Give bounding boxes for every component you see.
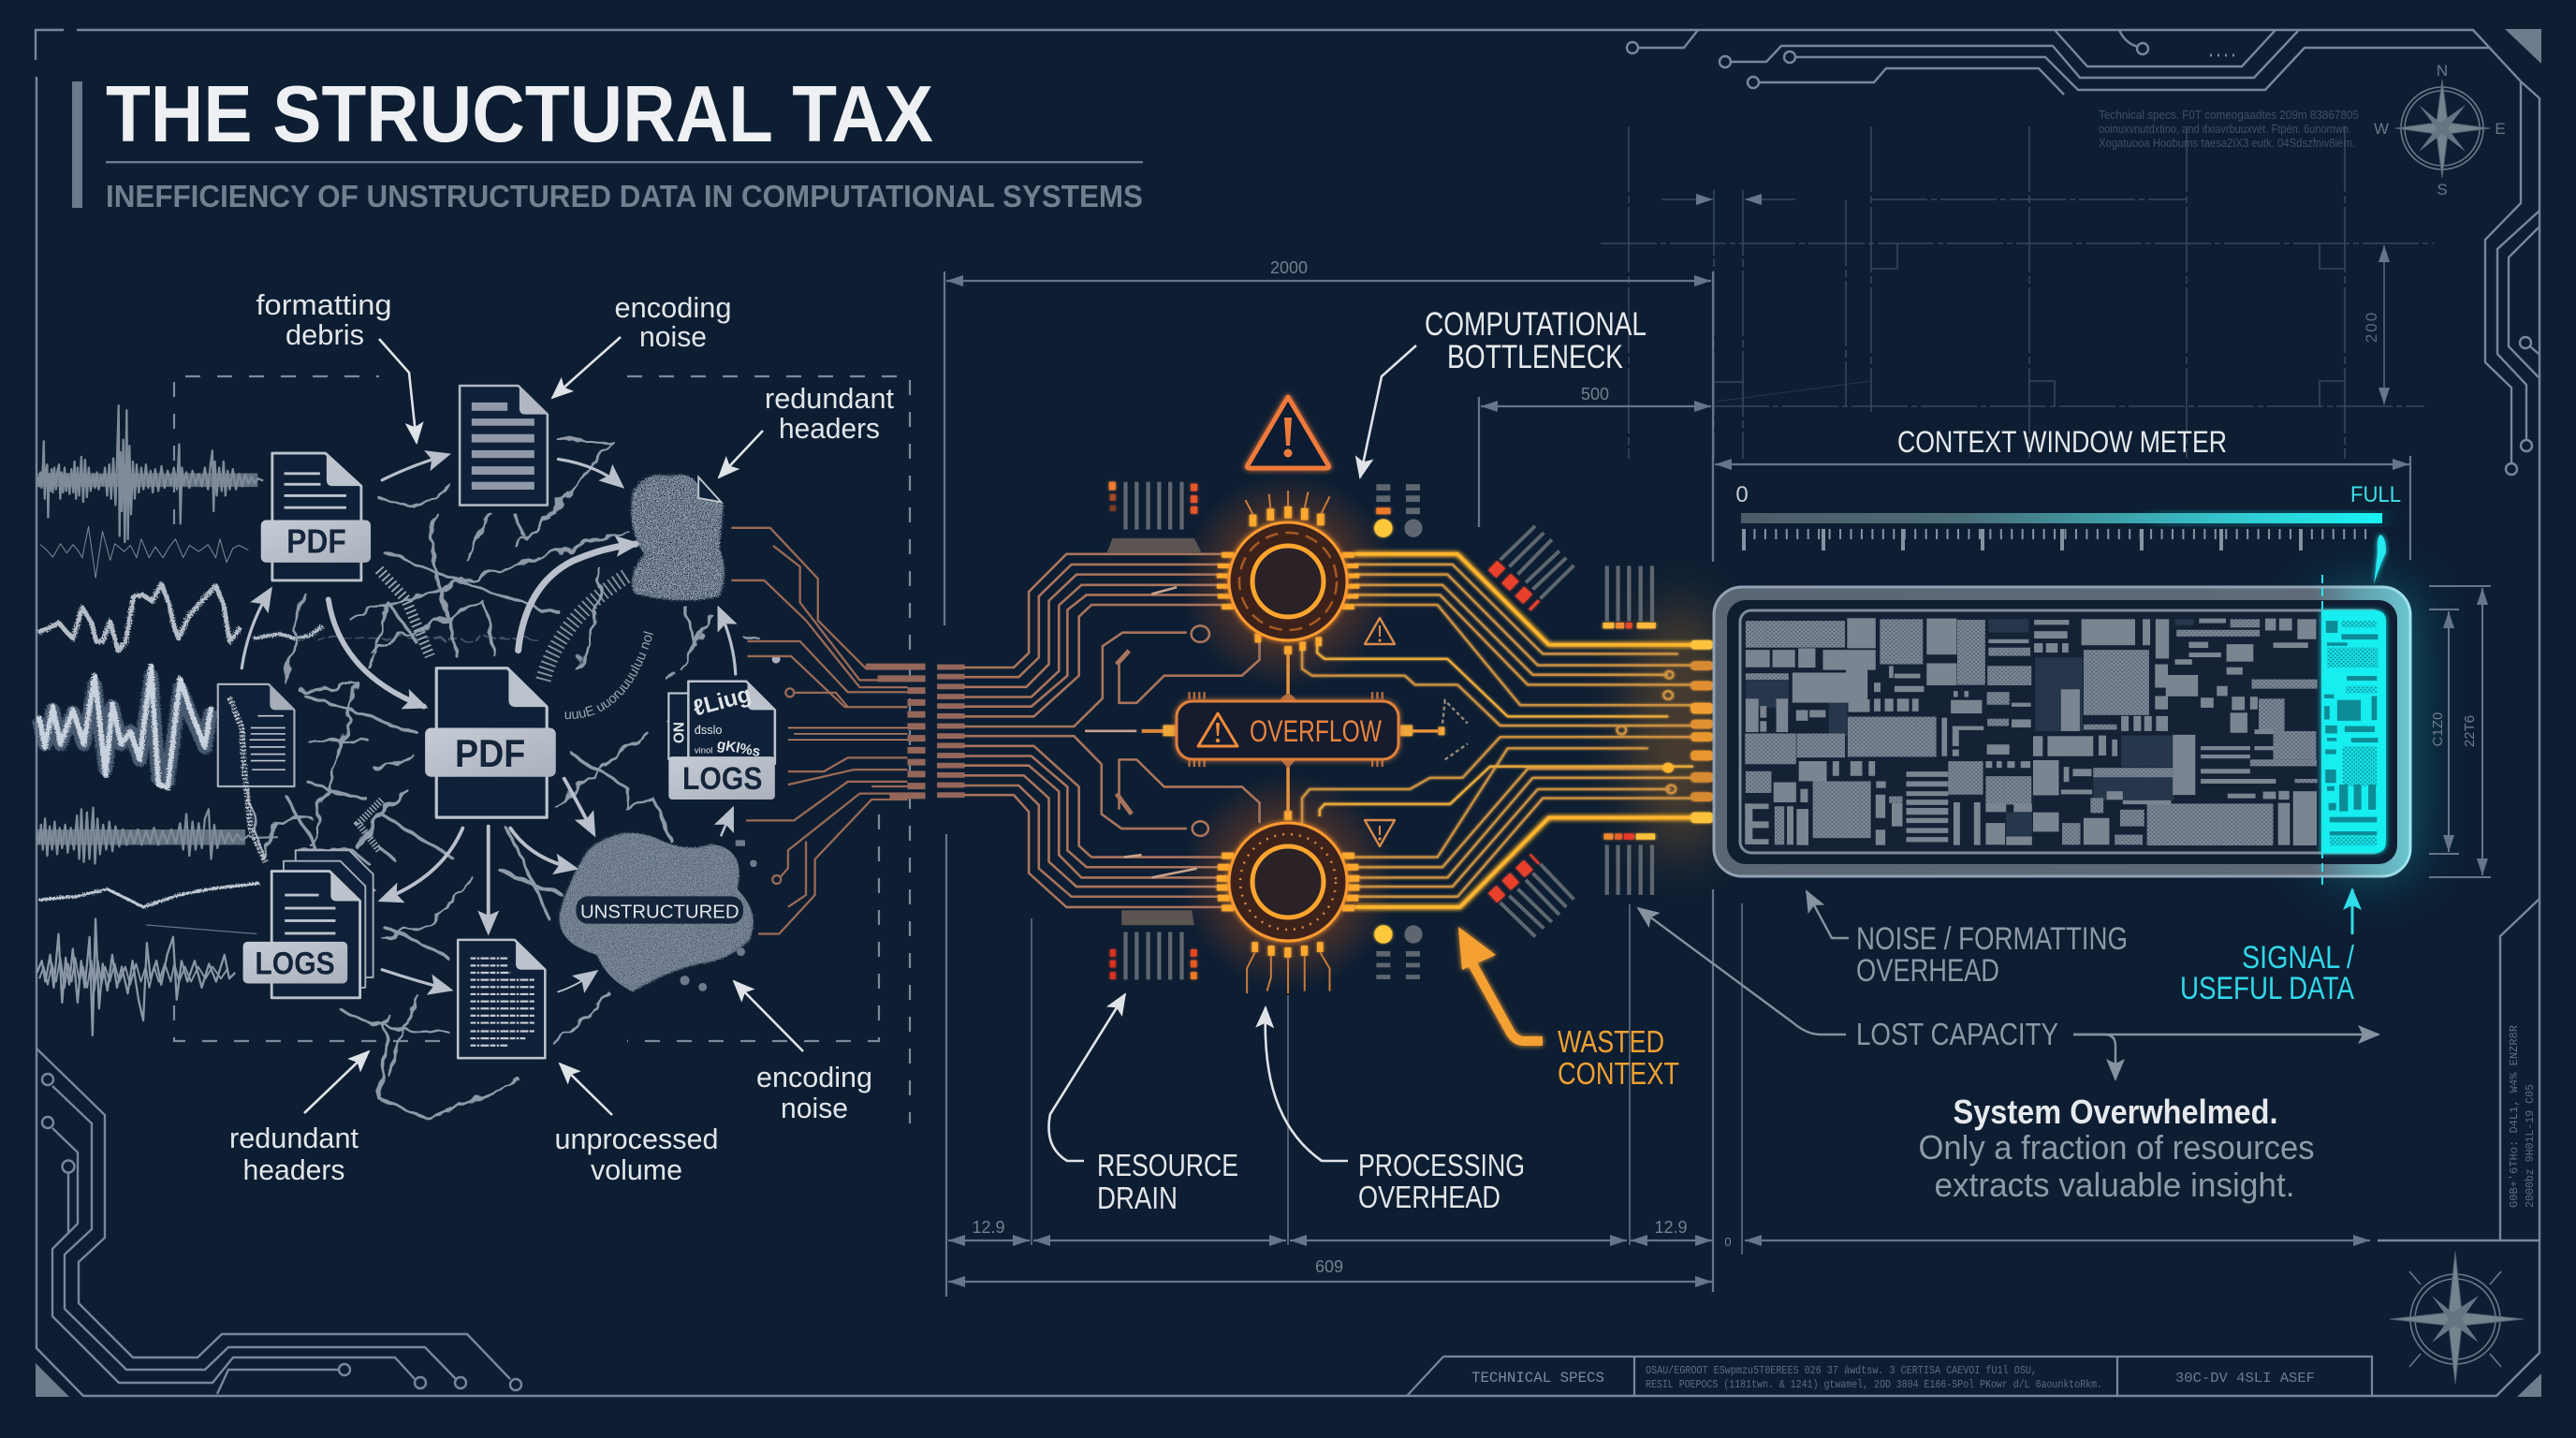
label: wasted context — [1558, 1024, 1679, 1091]
document: logs garbled: đsslo — [695, 723, 723, 737]
output pads — [1662, 640, 1713, 823]
dimension lines — [944, 271, 2370, 1297]
dimension labels: 12.9 — [1654, 1218, 1688, 1237]
document: logs stack: LOGS — [255, 946, 335, 981]
copper traces left — [963, 554, 1260, 907]
side notes — [2508, 1025, 2537, 1208]
panel: context window meter — [1713, 425, 2491, 888]
label: computational bottleneck: COMPUTATIONAL — [1425, 306, 1647, 343]
dimension labels: 12.9 — [972, 1218, 1005, 1237]
arrows: lost capacity — [1638, 908, 2378, 1079]
status lights — [1109, 482, 1656, 979]
unstructured blob — [560, 655, 781, 991]
window dimensions — [2429, 586, 2491, 877]
label: computational bottleneck: BOTTLENECK — [1447, 339, 1623, 375]
document: logs garbled: NO — [669, 722, 685, 743]
label: processing overhead: PROCESSING — [1358, 1148, 1525, 1182]
window inner — [1727, 600, 2397, 864]
summary text — [1919, 1128, 2314, 1204]
subtitle: INEFFICIENCY OF UNSTRUCTURED DATA IN COMPUTATIONAL SYSTEMS — [106, 179, 1143, 213]
accent bar — [72, 81, 82, 208]
document: logs garbled: ℓLiug — [691, 682, 754, 722]
summary heading: System Overwhelmed. — [1953, 1093, 2278, 1131]
dimension labels: 2000 — [1270, 258, 1308, 277]
arrow: signal — [2351, 889, 2353, 934]
window frame — [1740, 610, 2383, 853]
meter bar — [2153, 513, 2382, 523]
title: THE STRUCTURAL TAX — [106, 70, 933, 159]
upper right traces — [1302, 565, 1693, 897]
label: resource drain: RESOURCE — [1097, 1148, 1238, 1182]
label: processing overhead: OVERHEAD — [1358, 1180, 1500, 1214]
source labels: redundant — [765, 382, 894, 415]
summary text: extracts valuable insight. — [1934, 1166, 2295, 1204]
source labels: noise — [781, 1092, 848, 1124]
title block: TECHNICAL SPECS — [1471, 1370, 1604, 1387]
compass top right: E — [2495, 120, 2506, 138]
document: text page — [458, 940, 545, 1058]
technical note: Xogatuooa Hoobums taesa2IX3 eutk. 04Sdszfniv8iém. — [2099, 136, 2355, 150]
source labels: noise — [639, 320, 707, 353]
source labels: encoding — [614, 291, 732, 324]
window bezel — [1714, 587, 2410, 876]
diagonal bar groups — [1500, 526, 1573, 936]
waveform 2 — [40, 527, 248, 578]
meter dimension — [1713, 456, 2410, 560]
panel: data chaos — [217, 384, 926, 1121]
connector comb — [866, 664, 926, 799]
chip spikes and legs — [1246, 491, 1330, 993]
document: redacted — [460, 386, 548, 506]
compass top right: N — [2437, 62, 2448, 80]
label: signal — [2180, 940, 2354, 1006]
compass top right: W — [2374, 120, 2389, 138]
label: signal: SIGNAL / — [2242, 940, 2354, 976]
waveform 1 — [37, 405, 263, 542]
waveform 4 — [38, 667, 212, 787]
meter ticks — [1742, 534, 2372, 539]
full label: FULL — [2350, 482, 2401, 507]
window dimension labels: C1Z0 — [2430, 712, 2446, 746]
overflow badge — [1177, 701, 1398, 759]
label: noise overhead: OVERHEAD — [1856, 953, 1999, 989]
signal data blocks — [2324, 621, 2378, 845]
source labels: redundant — [229, 1122, 359, 1154]
label: computational bottleneck — [1425, 306, 1647, 375]
waveform 5 — [37, 808, 278, 863]
source labels: unprocessed — [554, 1123, 719, 1155]
title block: 30C-DV 4SLI ASEF — [2175, 1371, 2315, 1387]
document: logs garbled — [668, 682, 775, 800]
garbled text ribbon — [564, 621, 657, 719]
label: wasted context: CONTEXT — [1558, 1056, 1679, 1091]
title block: RESIL POEPOCS (1181twn. & 1241) gtwamel, 2OD 3804 E166-SPol PKowr d/L 6aounktoRkm. — [1646, 1378, 2102, 1391]
scribble ribbons — [359, 569, 627, 850]
document: PDF small: PDF — [286, 523, 346, 561]
source label arrows — [304, 337, 1416, 1161]
dimension 200: 200 — [2363, 311, 2380, 343]
connector glow — [1629, 599, 1732, 861]
chip halos — [1180, 474, 1396, 689]
small warning down — [1365, 820, 1395, 846]
bottom chip — [1229, 823, 1347, 941]
document: PDF large — [425, 668, 556, 817]
waveform 6 — [38, 883, 259, 907]
signal block — [2321, 610, 2386, 853]
overflow links — [1286, 653, 1290, 814]
grey bar groups — [1123, 482, 1654, 979]
grey chip caps — [1106, 538, 1202, 925]
debris lines — [244, 439, 758, 1119]
source labels: headers — [243, 1153, 344, 1186]
title block: OSAU/EGROOT ESwpmzu5T0EREES 026 37 áwdtsw. 3 CERTISA CAEVOI fU1l OSU, — [1646, 1364, 2037, 1377]
ribbon text: uuuE uuoruuuuIuu nol — [565, 631, 653, 719]
source labels: debris — [285, 318, 364, 351]
panel: waveforms — [37, 405, 323, 1035]
label: wasted context: WASTED — [1558, 1024, 1664, 1059]
header — [72, 70, 1143, 213]
label: signal: USEFUL DATA — [2180, 971, 2354, 1006]
meter heading: CONTEXT WINDOW METER — [1897, 425, 2227, 459]
flow arrows — [242, 455, 736, 991]
dimension labels: 609 — [1315, 1257, 1343, 1276]
unstructured blob: UNSTRUCTURED — [580, 902, 739, 922]
technical note — [2099, 108, 2359, 150]
cyan halo — [2317, 590, 2415, 875]
label: lost capacity: LOST CAPACITY — [1856, 1017, 2058, 1051]
blueprint grid top right — [1601, 126, 2434, 459]
warning mark — [1284, 418, 1292, 457]
document: scribbled — [218, 684, 294, 862]
window dimension labels — [2430, 712, 2478, 747]
overflow side connectors — [1164, 726, 1444, 736]
waveform 3 — [37, 584, 323, 651]
dimension labels: 500 — [1581, 385, 1609, 404]
summary — [1919, 1093, 2314, 1204]
side notes: G0B+'6THo: D4L1, W4% ENZR8R — [2508, 1025, 2521, 1208]
source labels: encoding — [756, 1061, 872, 1093]
small warning up — [1365, 618, 1395, 644]
window dimension labels: 22T6 — [2462, 715, 2478, 747]
document: logs garbled: LOGS — [682, 761, 762, 797]
title block — [1407, 1357, 2372, 1396]
panel: bottleneck circuit — [937, 397, 1732, 993]
label: resource drain — [1097, 1148, 1238, 1215]
compass top right: S — [2437, 181, 2448, 198]
source labels: formatting — [256, 288, 391, 321]
summary text: Only a fraction of resources — [1919, 1128, 2314, 1167]
input comb pads — [937, 665, 965, 798]
label: noise overhead: NOISE / FORMATTING — [1856, 921, 2128, 957]
document: logs garbled: gKl%s — [716, 737, 762, 760]
waveform 7 — [37, 919, 235, 1035]
document: PDF small — [261, 453, 371, 580]
side notes: 2000bz 9H01L-19 C05 — [2524, 1084, 2537, 1208]
document: logs garbled: vinol — [695, 745, 712, 756]
bright outer traces — [1354, 554, 1693, 907]
arrow: noise overhead — [1807, 891, 1849, 938]
source labels: volume — [591, 1153, 682, 1186]
dimension labels: 0 — [1724, 1235, 1732, 1249]
document: logs stack — [243, 850, 373, 998]
dashed panel boundary — [174, 376, 910, 1123]
source labels: headers — [779, 412, 880, 445]
compass top right — [2374, 62, 2506, 198]
technical note: Technical specs. F0T comeogaadtes 209m 83867805 — [2099, 108, 2359, 122]
label: processing overhead — [1358, 1148, 1525, 1214]
copper traces to connector — [731, 528, 907, 934]
top chip — [1229, 522, 1347, 640]
technical note: ooinuxvnutdxtino, and ifxiavrbuuxvét. Ftpén. 6unomwn. — [2099, 122, 2351, 136]
zero label: 0 — [1735, 482, 1749, 507]
dimension labels — [972, 258, 1732, 1276]
document: PDF large: PDF — [455, 731, 525, 775]
noise blocks — [1745, 618, 2318, 845]
top warning triangle — [1247, 397, 1329, 468]
label: resource drain: DRAIN — [1097, 1181, 1178, 1215]
compass bottom right — [2390, 1252, 2524, 1384]
overflow badge: OVERFLOW — [1250, 714, 1383, 748]
noisy torn document — [631, 475, 724, 600]
title rule — [106, 161, 1143, 163]
top chip pads — [1217, 506, 1359, 958]
label: noise overhead — [1856, 921, 2128, 989]
arrow: wasted context — [1458, 927, 1543, 1041]
source labels — [229, 288, 894, 1186]
signal boundary — [2321, 575, 2323, 888]
pointer — [2374, 535, 2386, 584]
